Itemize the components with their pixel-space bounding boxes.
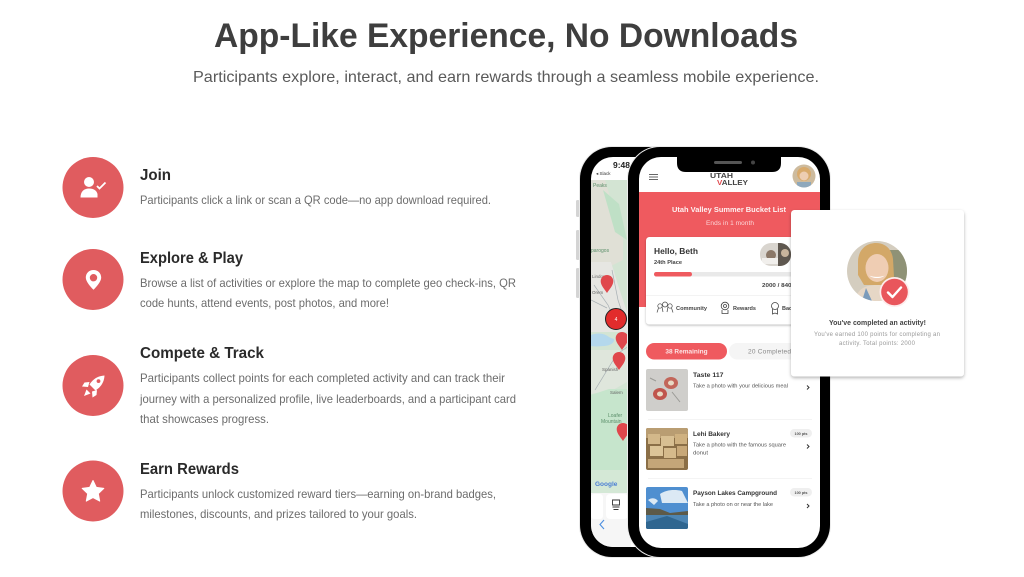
map: Peaks xyxy=(593,183,607,189)
chevron xyxy=(807,386,809,390)
participant photos xyxy=(760,243,791,266)
points badge xyxy=(790,429,812,438)
popup: activity completed xyxy=(791,210,964,376)
heading: join: Join xyxy=(140,167,171,184)
notch xyxy=(677,157,781,172)
activity description: donut xyxy=(693,450,708,456)
text: compete description: that showcases progress. xyxy=(140,412,269,426)
back phone: map view xyxy=(576,146,656,558)
chevron xyxy=(807,504,809,508)
map: Orem xyxy=(592,290,604,295)
red header band xyxy=(639,192,820,307)
card nav: badges: Badges xyxy=(782,306,802,312)
points badge: 100 pts xyxy=(794,491,808,495)
card nav: community xyxy=(657,302,708,312)
popup message xyxy=(814,332,940,347)
logo: UTAH xyxy=(710,173,733,180)
heading: explore and play: Explore & Play xyxy=(140,250,243,267)
tab: remaining: 38 Remaining xyxy=(665,348,708,356)
logo: VALLEY xyxy=(717,180,748,187)
step: explore and play xyxy=(62,249,516,310)
popup message: You've earned 100 points for completing an xyxy=(814,332,940,338)
activity description xyxy=(693,442,786,456)
tab: completed xyxy=(729,343,809,360)
map cluster marker: 4 xyxy=(615,317,618,323)
tab: remaining xyxy=(646,343,727,360)
activity name: Payson Lakes Campground xyxy=(693,490,777,497)
hamburger menu xyxy=(649,174,658,180)
popup heading: You've completed an activity! xyxy=(829,318,926,327)
points: 2000 / 8400 xyxy=(762,283,795,289)
map: Salem xyxy=(610,390,623,395)
text: compete description: journey with a personalized profile, live leaderboards, and a participant card xyxy=(139,392,516,406)
photo: food xyxy=(646,369,688,411)
map: parogos xyxy=(591,248,610,254)
progress bar xyxy=(654,272,816,276)
icon: rocket xyxy=(62,355,124,416)
text: explore description xyxy=(140,276,516,310)
card nav: rewards: Rewards xyxy=(733,306,756,312)
activity description: Take a photo on or near the lake xyxy=(693,502,773,508)
points badge xyxy=(790,488,812,496)
activity: taste 117 xyxy=(646,369,809,411)
text: earn description: Participants unlock customized reward tiers—earning on-brand badges, xyxy=(140,487,496,501)
profile avatar xyxy=(792,164,816,188)
status bar xyxy=(596,162,630,175)
text: join description: Participants click a link or scan a QR code—no app download required. xyxy=(140,193,491,207)
icon: map pin xyxy=(62,249,124,310)
card nav: community: Community xyxy=(676,306,708,312)
heading: compete and track: Compete & Track xyxy=(140,345,264,362)
activity description: Take a photo with your delicious meal xyxy=(693,384,788,390)
logo xyxy=(710,173,748,187)
activity name: Lehi Bakery xyxy=(693,431,730,438)
chevron xyxy=(807,444,809,448)
browser toolbar xyxy=(591,493,631,547)
step: earn rewards xyxy=(62,460,496,522)
map: Spanish xyxy=(602,367,619,372)
side buttons xyxy=(576,200,580,298)
icon: person with check xyxy=(62,157,124,218)
map: Lindon xyxy=(592,274,606,279)
avatar photo xyxy=(847,241,907,301)
check badge xyxy=(880,277,910,307)
photo: lake xyxy=(646,487,688,529)
campaign heading: Ends in 1 month xyxy=(706,220,754,227)
activity: payson lakes campground xyxy=(646,487,812,529)
text: explore description: code hunts, attend events, post photos, and more! xyxy=(140,296,389,310)
map: Google xyxy=(595,481,618,488)
step: join xyxy=(62,157,491,218)
activity: lehi bakery xyxy=(646,428,812,470)
activity name: Taste 117 xyxy=(693,372,724,379)
subtitle: Participants explore, interact, and earn rewards through a seamless mobile experience. xyxy=(193,69,819,86)
front phone: app view xyxy=(627,146,831,558)
greeting: Hello, Beth xyxy=(654,246,698,256)
points badge: 100 pts xyxy=(794,432,808,436)
text: earn description xyxy=(140,487,496,521)
tab: completed: 20 Completed xyxy=(748,348,791,356)
text: earn description: milestones, discounts, and prizes tailored to your goals. xyxy=(140,507,417,521)
campaign heading: Utah Valley Summer Bucket List xyxy=(672,205,786,214)
status bar: ◂ Slack xyxy=(596,171,611,176)
title: App-Like Experience, No Downloads xyxy=(214,17,798,55)
map xyxy=(591,180,627,493)
map cluster marker xyxy=(606,308,626,330)
map: Mountain xyxy=(601,419,622,425)
map pins xyxy=(601,275,629,441)
campaign heading xyxy=(672,205,786,227)
card nav: rewards xyxy=(721,302,756,314)
map: Loafer xyxy=(608,413,623,419)
text: compete description: Participants collect points for each completed activity and can track their xyxy=(140,371,505,385)
rank: 24th Place xyxy=(654,260,682,266)
icon: star xyxy=(62,460,124,522)
step: compete and track xyxy=(62,345,516,426)
card nav: badges xyxy=(772,302,802,314)
heading: earn rewards: Earn Rewards xyxy=(140,461,239,478)
popup message: activity. Total points: 2000 xyxy=(839,341,916,347)
status bar: 9:48 xyxy=(613,160,630,170)
text: compete description xyxy=(139,371,516,426)
profile card xyxy=(644,237,791,327)
activity description: Take a photo with the famous square xyxy=(693,442,786,448)
photo: donuts xyxy=(646,428,688,470)
text: explore description: Browse a list of activities or explore the map to complete geo check-ins, QR xyxy=(140,276,516,290)
